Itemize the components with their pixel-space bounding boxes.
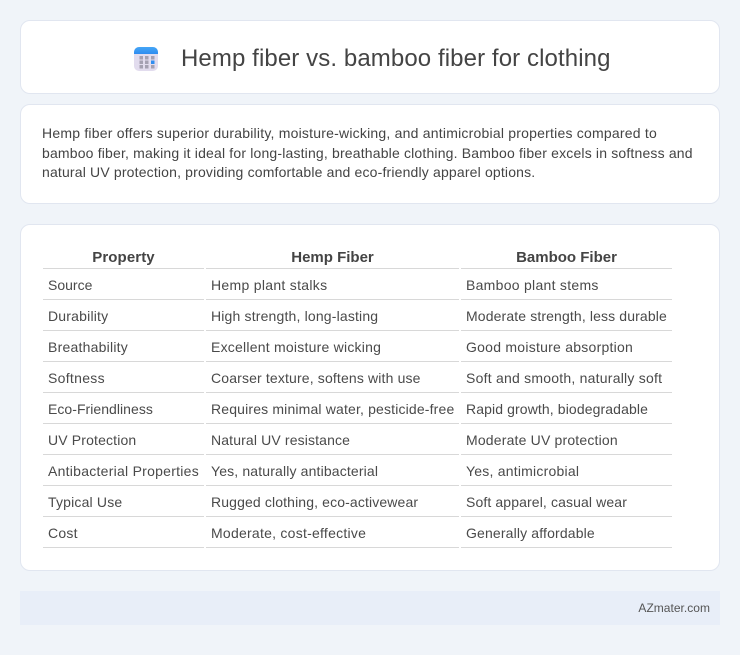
comparison table panel: Yes, antimicrobial [466, 463, 579, 479]
title panel [20, 20, 720, 94]
summary text: natural UV protection, providing comfortable and eco-friendly apparel options. [42, 164, 535, 180]
summary text: bamboo fiber, making it ideal for long-lasting, breathable clothing. Bamboo fiber excels in softness and [42, 145, 693, 161]
comparison table panel: Yes, naturally antibacterial [211, 463, 378, 479]
summary panel [20, 104, 720, 204]
comparison table panel [20, 224, 720, 571]
row: Typical Use: Typical Use [48, 494, 122, 510]
footer credit: AZmater.com [638, 601, 710, 615]
comparison table panel: Soft apparel, casual wear [466, 494, 627, 510]
comparison table panel: Soft and smooth, naturally soft [466, 370, 662, 386]
header: Property: Property [92, 249, 155, 266]
row: Breathability: Breathability [48, 339, 128, 355]
row: Cost: Cost [48, 525, 78, 541]
comparison table panel: Good moisture absorption [466, 339, 633, 355]
comparison table panel: Requires minimal water, pesticide-free [211, 401, 454, 417]
row: Eco-Friendliness: Eco-Friendliness [48, 401, 153, 417]
summary text [42, 125, 693, 180]
title: Hemp fiber vs. bamboo fiber for clothing [181, 45, 611, 72]
comparison table panel: High strength, long-lasting [211, 308, 378, 324]
comparison table panel: Moderate, cost-effective [211, 525, 366, 541]
comparison table panel: Hemp plant stalks [211, 277, 327, 293]
footer bar [20, 591, 720, 625]
comparison table panel: Moderate UV protection [466, 432, 618, 448]
comparison table panel: Natural UV resistance [211, 432, 350, 448]
comparison table panel: Excellent moisture wicking [211, 339, 381, 355]
row: Source: Source [48, 277, 92, 293]
row: Softness: Softness [48, 370, 105, 386]
comparison table panel: Coarser texture, softens with use [211, 370, 421, 386]
row: UV Protection: UV Protection [48, 432, 136, 448]
summary text: Hemp fiber offers superior durability, moisture-wicking, and antimicrobial properties compared to [42, 125, 657, 141]
icon: calendar [134, 47, 158, 71]
comparison table panel: Rugged clothing, eco-activewear [211, 494, 418, 510]
header: Bamboo Fiber: Bamboo Fiber [516, 249, 617, 266]
comparison table panel: Generally affordable [466, 525, 595, 541]
header: Hemp Fiber: Hemp Fiber [291, 249, 374, 266]
comparison table panel: Moderate strength, less durable [466, 308, 667, 324]
row: Antibacterial Properties: Antibacterial Properties [48, 463, 199, 479]
row: Durability: Durability [48, 308, 108, 324]
comparison table panel: Bamboo plant stems [466, 277, 599, 293]
comparison table panel: Rapid growth, biodegradable [466, 401, 648, 417]
